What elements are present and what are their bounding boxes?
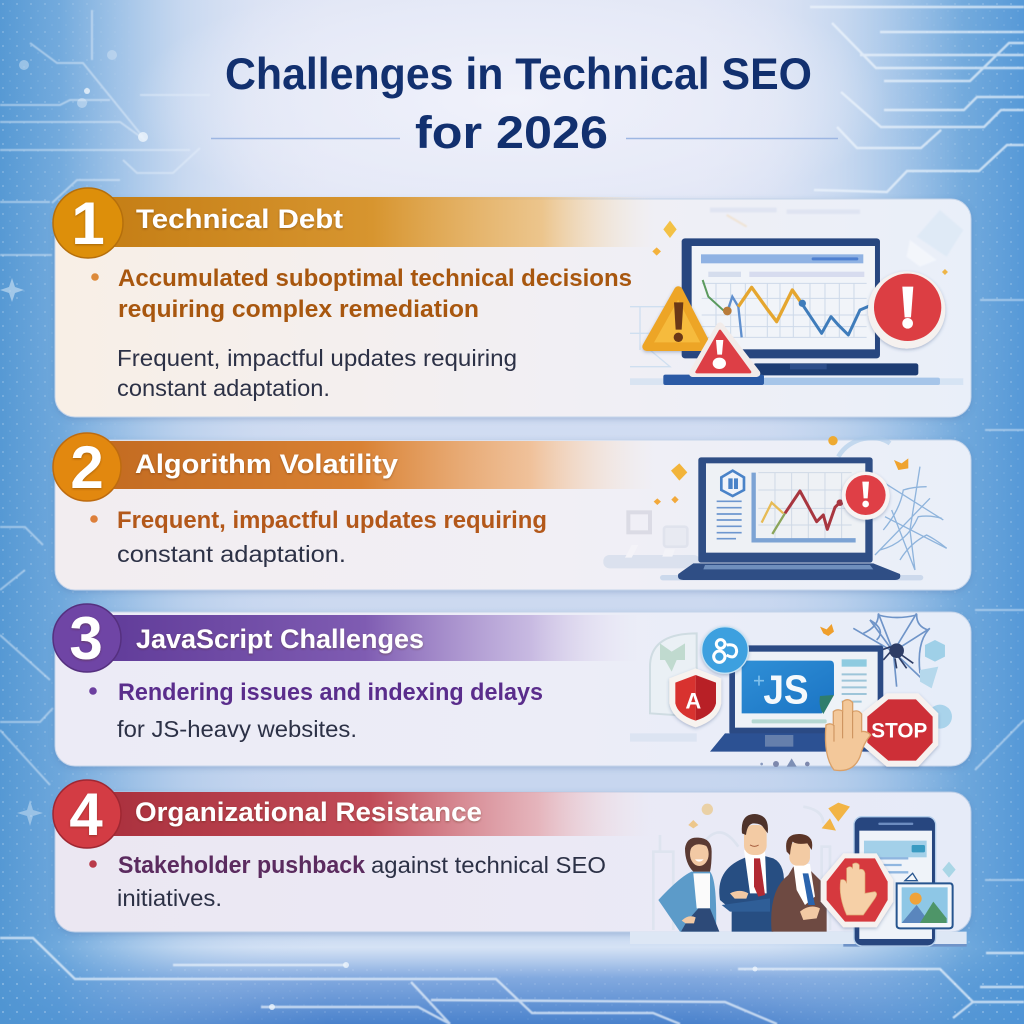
text block 2: Frequent, impactful updates requiring <box>117 507 547 534</box>
panel 2: algorithm volatility <box>53 433 971 590</box>
text block 1: Frequent, impactful updates requiring <box>117 345 517 371</box>
panel 1: technical debt <box>53 188 971 417</box>
title: for 2026 <box>415 107 608 158</box>
text block 1: constant adaptation. <box>117 375 330 401</box>
ribbon heading 3: JavaScript Challenges <box>136 624 424 654</box>
illustration: JS laptop, stop sign, hand, spider web: A <box>685 688 701 713</box>
number badge 3 <box>53 604 121 672</box>
card background 2 <box>55 440 971 590</box>
text block 3: for JS-heavy websites. <box>117 716 357 742</box>
illustration: laptop with warnings <box>630 210 963 385</box>
illustration: team, stop hand, phone <box>630 803 967 947</box>
ribbon heading 4: Organizational Resistance <box>135 797 482 827</box>
number badge 2: 2 <box>70 434 104 501</box>
panel 3: javascript challenges <box>53 604 971 771</box>
text block 1: requiring complex remediation <box>118 296 479 323</box>
text block 1: Accumulated suboptimal technical decisions <box>118 265 632 292</box>
ribbon heading 1: Technical Debt <box>136 204 343 234</box>
ribbon heading 2: Algorithm Volatility <box>135 449 398 479</box>
ribbon heading 1 <box>90 197 655 247</box>
card background 1 <box>55 199 971 417</box>
number badge 3: 3 <box>69 605 103 672</box>
ribbon heading 4 <box>90 792 650 836</box>
text block 4: against technical SEO <box>371 852 606 878</box>
text block 4: initiatives. <box>117 885 222 911</box>
text block 3 <box>89 679 543 742</box>
number badge 1 <box>53 188 123 258</box>
illustration: JS laptop, stop sign, hand, spider web: STOP <box>871 718 927 742</box>
text block 2 <box>90 507 547 567</box>
panel 4: organizational resistance <box>53 780 971 947</box>
illustration: JS laptop, stop sign, hand, spider web: JS <box>763 666 809 712</box>
number badge 2 <box>53 433 121 501</box>
number badge 4: 4 <box>69 781 103 848</box>
card background 4 <box>55 792 971 932</box>
ribbon heading 2 <box>90 441 655 489</box>
text block 4: Stakeholder pushback <box>118 852 366 879</box>
text block 1 <box>91 265 632 401</box>
number badge 1: 1 <box>71 190 105 257</box>
text block 2: constant adaptation. <box>117 541 346 567</box>
illustration: laptop with volatile chart and web <box>603 436 947 580</box>
card background 3 <box>55 612 971 766</box>
title underline flourishes <box>211 138 838 140</box>
text block 4 <box>89 852 606 911</box>
title <box>225 50 812 158</box>
illustration: JS laptop, stop sign, hand, spider web <box>630 613 952 771</box>
text block 3: Rendering issues and indexing delays <box>118 679 543 706</box>
ribbon heading 3 <box>90 615 640 661</box>
number badge 4 <box>53 780 121 848</box>
title: Challenges in Technical SEO <box>225 50 812 99</box>
